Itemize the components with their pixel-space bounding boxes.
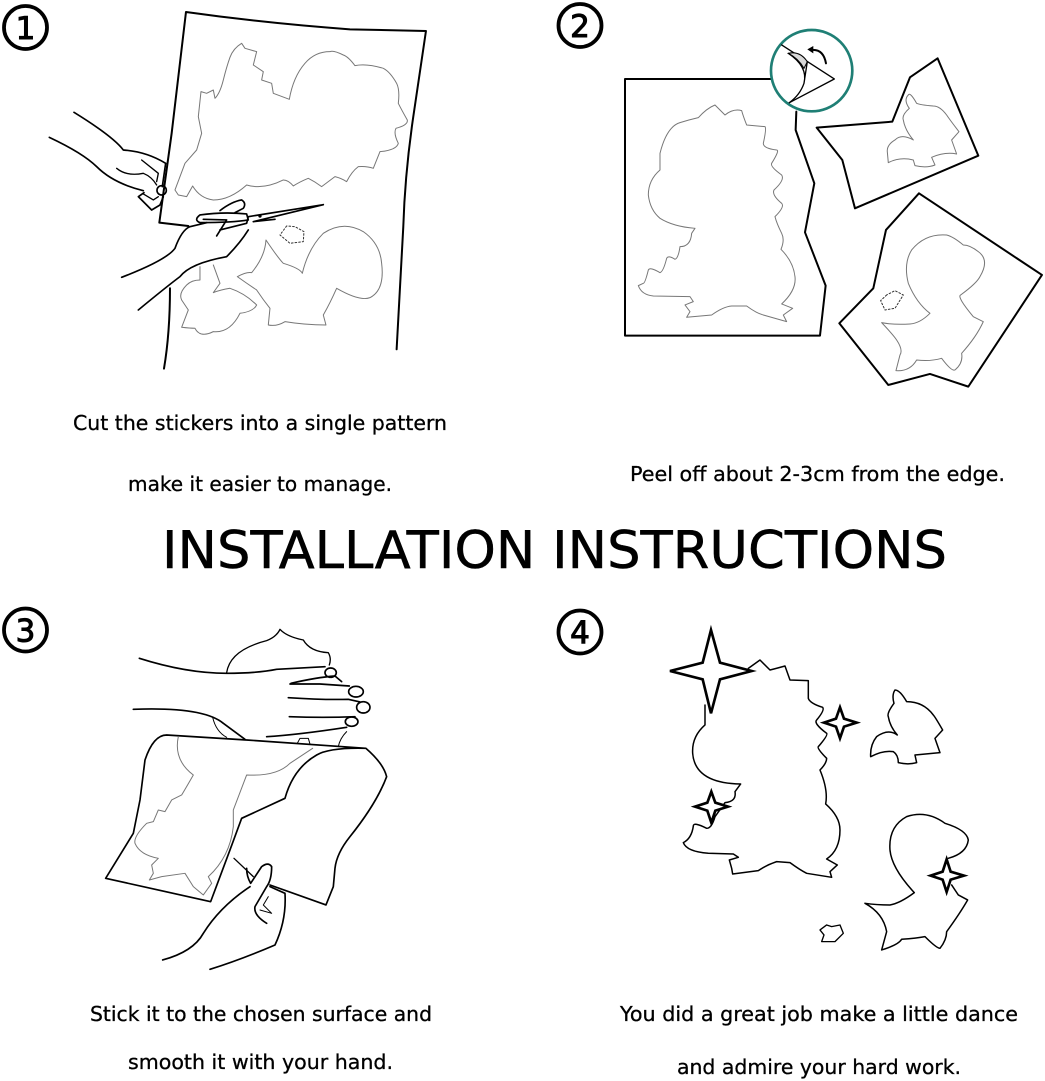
caption step 2: Peel off about 2-3cm from the edge. [630,462,1005,486]
icon: sparkle on duck [931,859,964,892]
caption step 3 [90,1002,432,1074]
step number 1: 1 [16,11,35,47]
icon: curved arrow [807,46,826,63]
panel: step 1 cut the stickers [4,6,447,496]
illustration: hands smoothing sticker [106,629,387,969]
caption step 4: You did a great job make a little dance [619,1002,1018,1026]
panel: step 4 finished [558,610,1018,1079]
title: INSTALLATION INSTRUCTIONS [162,521,947,581]
caption step 4: and admire your hard work. [677,1055,961,1079]
illustration: finished stickers with sparkles [670,630,968,950]
icon: sparkle right [824,707,857,738]
callout: peeled corner in teal circle [771,30,852,111]
caption step 1: make it easier to manage. [128,472,392,496]
step number 1 [4,6,47,49]
step number 4 [558,610,602,654]
illustration: hands cutting sticker sheet [49,12,426,369]
step number 4: 4 [570,616,590,652]
caption step 1: Cut the stickers into a single pattern [73,411,447,435]
icon: sparkle left [695,792,728,823]
step number 2: 2 [570,9,590,45]
icon: large sparkle [670,630,752,713]
step number 2 [558,4,602,47]
illustration: peeled sticker sheets [625,30,1042,387]
panel: step 3 stick and smooth [4,608,432,1074]
caption step 4 [619,1002,1018,1079]
panel: step 2 peel off [558,4,1042,486]
caption step 1 [73,411,447,496]
step number 3: 3 [16,614,35,650]
step number 3 [4,608,47,652]
caption step 3: smooth it with your hand. [128,1050,393,1074]
caption step 3: Stick it to the chosen surface and [90,1002,432,1026]
